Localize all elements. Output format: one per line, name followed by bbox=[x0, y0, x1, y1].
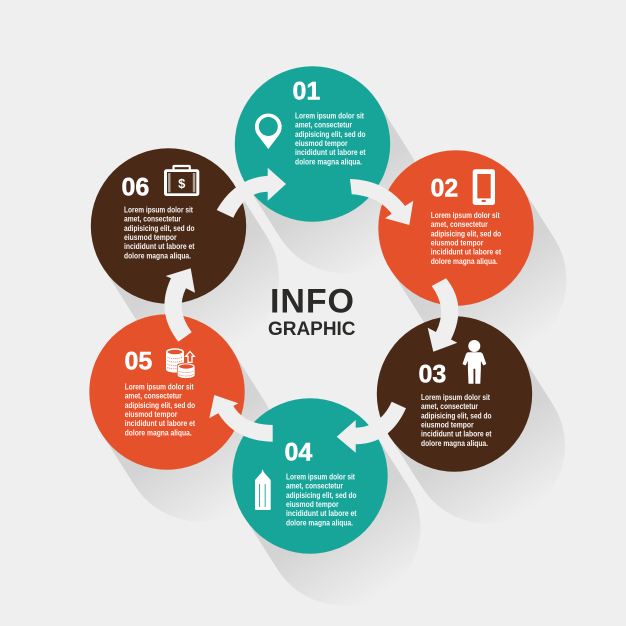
text block 05: incididunt ut labore et bbox=[125, 419, 195, 428]
text block 06: dolore magna aliqua. bbox=[124, 251, 191, 260]
title: GRAPHIC bbox=[268, 318, 356, 340]
text block 03: adipisicing elit, sed do bbox=[421, 411, 492, 420]
text block 03: amet, consectetur bbox=[421, 402, 478, 411]
number 01: 01 bbox=[292, 78, 320, 106]
text block 05: amet, consectetur bbox=[125, 392, 182, 401]
icon: smartphone bbox=[473, 169, 495, 205]
number 04: 04 bbox=[284, 438, 312, 466]
long shadows bbox=[167, 144, 489, 528]
panel: step 02 bbox=[378, 150, 534, 306]
text block 01: adipisicing elit, sed do bbox=[295, 130, 366, 139]
icon: briefcase with dollar: $ bbox=[178, 176, 186, 191]
arrow: 03 to 04 bbox=[337, 402, 406, 453]
icon: map pin bbox=[255, 113, 282, 149]
text block 02 bbox=[431, 211, 501, 266]
text block 06: amet, consectetur bbox=[124, 215, 181, 224]
icon: pencil bbox=[255, 469, 271, 510]
text block 01: Lorem ipsum dolor sit bbox=[295, 112, 364, 120]
text block 04: incididunt ut labore et bbox=[286, 509, 357, 518]
number 05: 05 bbox=[124, 348, 152, 376]
arrow: 04 to 05 bbox=[209, 395, 273, 442]
arrow: 05 to 06 bbox=[164, 268, 195, 342]
number 02: 02 bbox=[430, 174, 458, 202]
arrow: 02 to 03 bbox=[428, 278, 458, 352]
text block 03: eiusmod tempor bbox=[421, 420, 474, 430]
text block 05: eiusmod tempor bbox=[125, 410, 177, 419]
text block 01: incididunt ut labore et bbox=[295, 148, 366, 157]
text block 05 bbox=[125, 382, 195, 437]
text block 02: incididunt ut labore et bbox=[431, 248, 501, 257]
icon: person bbox=[462, 340, 486, 384]
text block 04: dolore magna aliqua. bbox=[286, 518, 353, 527]
title: INFO bbox=[270, 283, 354, 321]
text block 04: adipisicing elit, sed do bbox=[286, 491, 357, 500]
text block 06: incididunt ut labore et bbox=[124, 242, 195, 251]
text block 03 bbox=[421, 393, 492, 448]
text block 03: Lorem ipsum dolor sit bbox=[421, 393, 490, 402]
text block 01: dolore magna aliqua. bbox=[295, 157, 362, 166]
text block 04: amet, consectetur bbox=[286, 482, 343, 491]
panel: step 04 bbox=[232, 398, 388, 554]
text block 06: adipisicing elit, sed do bbox=[124, 224, 195, 233]
text block 04: Lorem ipsum dolor sit bbox=[286, 472, 355, 482]
text block 04: eiusmod tempor bbox=[286, 500, 339, 509]
text block 03: dolore magna aliqua. bbox=[421, 439, 488, 448]
text block 01 bbox=[295, 112, 366, 166]
icon: coins with up arrow bbox=[166, 348, 195, 378]
text block 02: amet, consectetur bbox=[431, 220, 488, 229]
arrow: 01 to 02 bbox=[350, 179, 413, 225]
text block 04 bbox=[286, 472, 357, 527]
text block 01: amet, consectetur bbox=[295, 121, 352, 130]
number 06: 06 bbox=[122, 174, 149, 202]
text block 05: Lorem ipsum dolor sit bbox=[125, 382, 194, 392]
text block 01: eiusmod tempor bbox=[295, 139, 348, 148]
icon: briefcase with dollar bbox=[164, 166, 199, 196]
text block 03: incididunt ut labore et bbox=[421, 430, 492, 439]
arrow: 06 to 01 bbox=[217, 168, 286, 218]
panel: step 03 bbox=[377, 316, 532, 472]
number 03: 03 bbox=[418, 360, 446, 388]
text block 06: eiusmod tempor bbox=[124, 233, 177, 242]
panel: step 01 bbox=[235, 66, 390, 222]
panel: step 05 bbox=[89, 314, 245, 470]
text block 06 bbox=[124, 206, 195, 260]
panel: step 06 bbox=[91, 148, 246, 304]
text block 05: dolore magna aliqua. bbox=[125, 428, 192, 437]
text block 02: Lorem ipsum dolor sit bbox=[431, 211, 500, 220]
text block 02: eiusmod tempor bbox=[431, 238, 483, 248]
text block 05: adipisicing elit, sed do bbox=[125, 401, 195, 410]
title bbox=[268, 283, 356, 340]
text block 02: adipisicing elit, sed do bbox=[431, 229, 501, 238]
text block 02: dolore magna aliqua. bbox=[431, 257, 498, 266]
text block 06: Lorem ipsum dolor sit bbox=[124, 206, 193, 214]
